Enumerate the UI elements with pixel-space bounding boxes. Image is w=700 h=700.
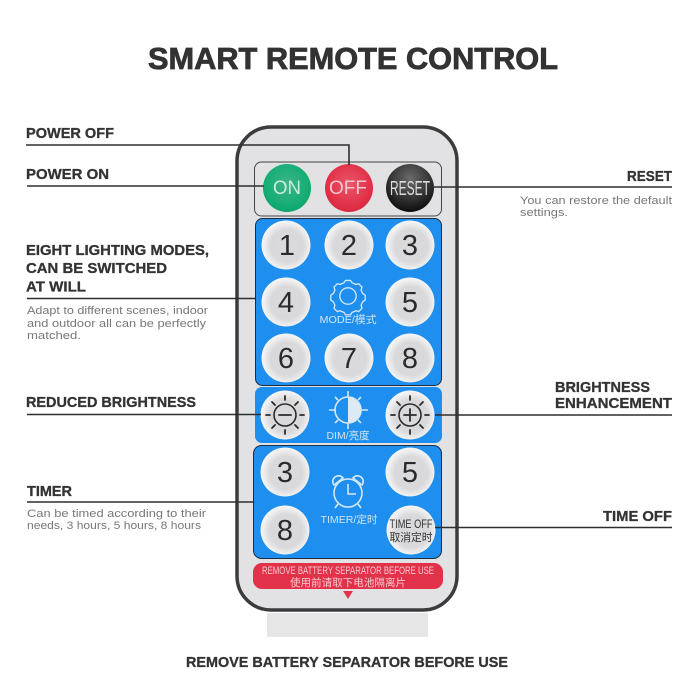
- button: 1: [262, 220, 310, 270]
- callout: power off: [26, 126, 349, 165]
- callout: timer: Can be timed according to their: [27, 508, 206, 520]
- button: timer 8: [260, 506, 310, 554]
- callout: eight lighting modes: EIGHT LIGHTING MODES,: [26, 243, 209, 259]
- callout: eight lighting modes: [26, 243, 255, 342]
- callout: brightness enhancement: BRIGHTNESS: [555, 380, 650, 396]
- callout: eight lighting modes: matched.: [27, 330, 81, 342]
- callout: reset: settings.: [520, 207, 568, 219]
- button: reset: [386, 164, 434, 212]
- footer note: REMOVE BATTERY SEPARATOR BEFORE USE: [186, 655, 508, 671]
- callout: eight lighting modes: CAN BE SWITCHED: [26, 261, 167, 277]
- button: time off: TIME OFF: [390, 517, 432, 531]
- button: timer 3: [260, 448, 310, 496]
- callout: timer: needs, 3 hours, 5 hours, 8 hours: [27, 520, 202, 532]
- mode label: MODE/模式: [320, 313, 377, 326]
- icon: warning arrow: [343, 591, 353, 599]
- callout: power off: POWER OFF: [26, 126, 114, 142]
- callout: eight lighting modes: AT WILL: [26, 280, 86, 296]
- callout: timer: TIMER: [27, 484, 73, 500]
- timer label: TIMER/定时: [320, 513, 378, 526]
- callout: eight lighting modes: Adapt to different scenes, indoor: [27, 305, 208, 317]
- button: 6: [262, 334, 310, 382]
- button: 2: 2: [341, 230, 357, 262]
- button: time off: 取消定时: [390, 530, 432, 544]
- callout: reset: [434, 169, 672, 219]
- title: SMART REMOTE CONTROL: [148, 41, 558, 76]
- button: 1: 1: [279, 230, 295, 262]
- icon: dim sun: [329, 391, 368, 429]
- button: 8: [386, 334, 434, 382]
- button: on: [263, 164, 311, 212]
- button: time off: [386, 506, 436, 554]
- panel: power buttons: [254, 162, 442, 216]
- battery separator tab: [267, 613, 428, 637]
- button: timer 8: 8: [277, 515, 293, 547]
- button: 3: [386, 220, 434, 270]
- callout: power on: POWER ON: [26, 167, 109, 183]
- button: off: OFF: [329, 178, 367, 199]
- panel: timer: [254, 446, 442, 558]
- icon: alarm clock: [333, 476, 363, 508]
- battery warning banner: 使用前请取下电池隔离片: [290, 576, 406, 589]
- button: 4: 4: [278, 287, 294, 319]
- button: timer 3: 3: [277, 457, 293, 489]
- button: timer 5: [386, 448, 434, 496]
- panel: lighting modes: [256, 218, 442, 386]
- button: increase brightness: [386, 390, 434, 440]
- button: 5: [386, 278, 434, 326]
- button: 6: 6: [278, 343, 294, 375]
- button: reset: RESET: [390, 178, 430, 200]
- button: 5: 5: [402, 287, 418, 319]
- button: 3: 3: [402, 230, 418, 262]
- button: timer 5: 5: [402, 457, 418, 489]
- button: 7: [324, 334, 374, 382]
- callout: brightness enhancement: [435, 380, 672, 415]
- icon: gear: [331, 280, 365, 315]
- button: 8: 8: [402, 343, 418, 375]
- button: reduce brightness: [260, 390, 310, 440]
- callout: reset: You can restore the default: [520, 195, 672, 207]
- panel: brightness: [255, 387, 442, 443]
- button: 4: [262, 278, 310, 326]
- button: on: ON: [273, 178, 301, 199]
- callout: brightness enhancement: ENHANCEMENT: [555, 396, 672, 412]
- callout: timer: [27, 484, 253, 532]
- button: off: [325, 164, 373, 212]
- remote control: [237, 127, 457, 610]
- callout: reset: RESET: [627, 169, 672, 185]
- remote body: [237, 127, 457, 610]
- button: 2: [324, 220, 374, 270]
- dim label: DIM/亮度: [326, 429, 370, 442]
- button: 7: 7: [341, 343, 357, 375]
- callout: eight lighting modes: and outdoor all can be perfectly: [27, 318, 207, 330]
- battery warning banner: REMOVE BATTERY SEPARATOR BEFORE USE: [262, 565, 434, 577]
- callout: reduced brightness: REDUCED BRIGHTNESS: [26, 395, 196, 411]
- battery warning banner: [253, 563, 443, 589]
- callout: time off: TIME OFF: [603, 509, 672, 525]
